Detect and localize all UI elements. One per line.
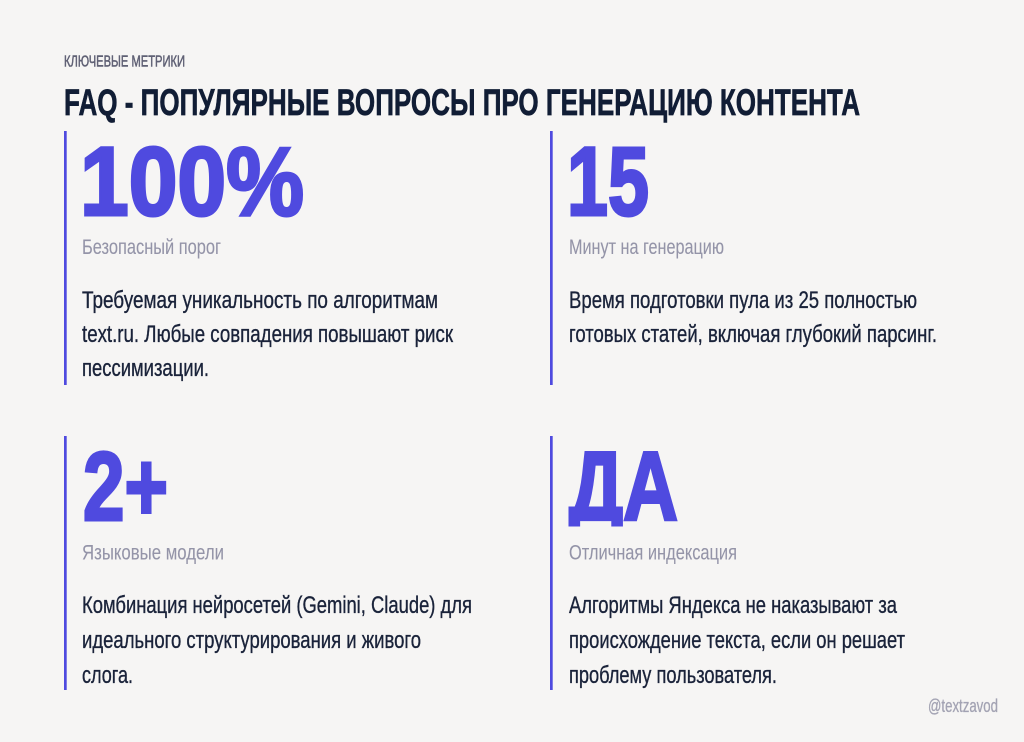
- description: [82, 592, 472, 689]
- panel accent bar: [550, 436, 553, 690]
- description: [82, 287, 453, 382]
- panel: 15: [550, 127, 937, 385]
- panel accent bar: [64, 436, 67, 690]
- metric value: ДА: [569, 432, 678, 540]
- description: проблему пользователя.: [569, 662, 777, 689]
- metric value: 2+: [83, 432, 168, 541]
- description: [569, 287, 937, 348]
- panel: 100%: [64, 127, 453, 385]
- panel: 2+: [64, 432, 472, 690]
- panel accent bar: [550, 131, 553, 385]
- description: Требуемая уникальность по алгоритмам: [82, 287, 438, 314]
- description: идеального структурирования и живого: [82, 627, 421, 654]
- description: Комбинация нейросетей (Gemini, Claude) для: [82, 592, 472, 619]
- panel accent bar: [64, 131, 67, 385]
- panel: ДА: [550, 432, 905, 690]
- eyebrow label: КЛЮЧЕВЫЕ МЕТРИКИ: [64, 54, 185, 70]
- description: text.ru. Любые совпадения повышают риск: [82, 321, 453, 348]
- description: пессимизации.: [82, 355, 209, 382]
- description: происхождение текста, если он решает: [569, 627, 905, 654]
- metric label: Отличная индексация: [569, 540, 737, 564]
- handle: @textzavod: [928, 695, 998, 716]
- metric label: Безопасный порог: [82, 235, 221, 259]
- metric value: 15: [567, 127, 649, 236]
- description: Время подготовки пула из 25 полностью: [569, 287, 917, 314]
- metric label: Языковые модели: [82, 540, 224, 564]
- description: [569, 592, 905, 689]
- description: Алгоритмы Яндекса не наказывают за: [569, 592, 897, 619]
- description: слога.: [82, 662, 133, 689]
- metric value: 100%: [80, 127, 304, 236]
- metric label: Минут на генерацию: [569, 235, 724, 259]
